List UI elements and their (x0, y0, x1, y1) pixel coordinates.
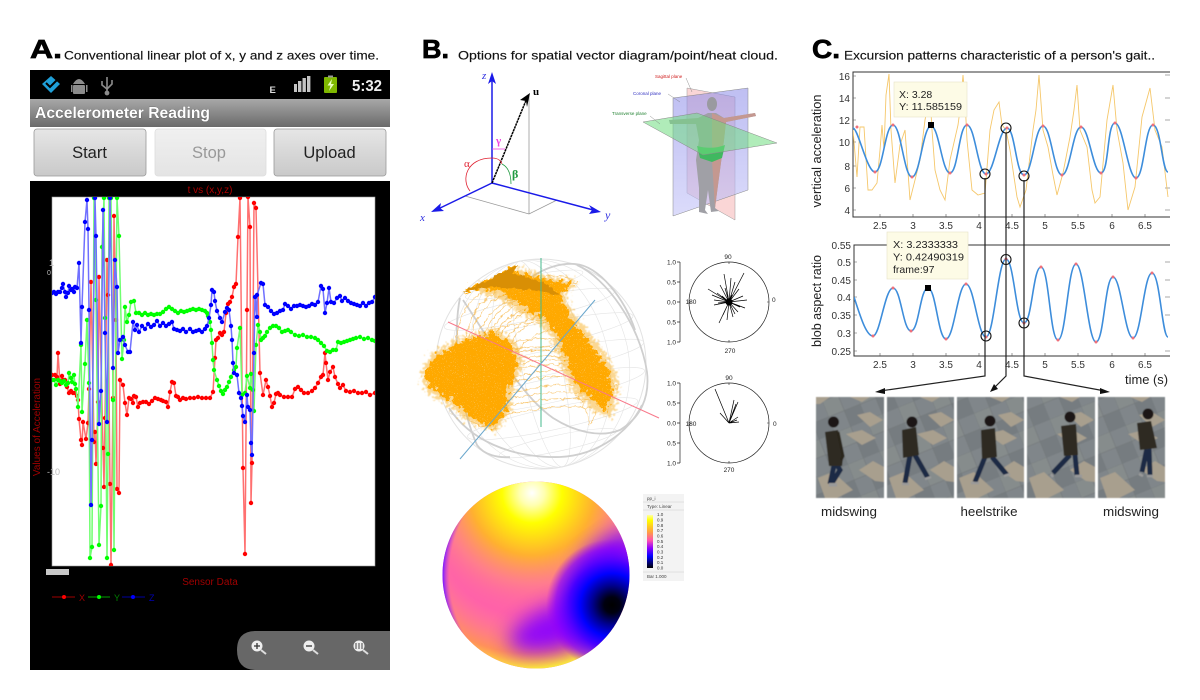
x axis labels: 4.5 (1005, 221, 1019, 232)
cluster fuzz (421, 268, 618, 432)
axis and angle labels: α (464, 158, 470, 170)
icon: blue check app (42, 76, 60, 93)
icon: usb (102, 77, 112, 95)
photo frame 5 (1098, 397, 1165, 498)
peak markers (856, 122, 1154, 180)
icon: zoom in (252, 640, 266, 654)
x axis labels: 4 (976, 221, 982, 232)
legend: heat colour scale: 0.9 (657, 518, 664, 522)
tooltip (887, 232, 968, 279)
labels: 1.0 (667, 380, 676, 388)
x axis labels: 5.5 (1071, 360, 1085, 371)
x axis title: time (s) (1125, 373, 1168, 387)
legend: heat colour scale: 0.1 (657, 560, 664, 565)
legend: Z (149, 593, 155, 603)
axes (448, 258, 659, 459)
zoom controls (237, 631, 390, 670)
labels: 0.0 (667, 300, 676, 306)
signal (854, 259, 1168, 342)
connectors: gait phases to frames (875, 123, 1110, 394)
labels: 90 (724, 254, 732, 261)
tooltip: X: 3.28 (899, 89, 932, 101)
sphere grid (416, 239, 666, 489)
axis and angle labels: u (533, 86, 539, 98)
legend: heat colour scale (643, 494, 684, 581)
photo strip: walking person (816, 397, 1165, 498)
cluster: arc (462, 265, 613, 413)
chart: heat sphere (442, 482, 630, 668)
legend: heat colour scale: 0.7 (657, 528, 664, 533)
series: x (52, 197, 375, 565)
series: y (52, 198, 375, 558)
button: start: Start (72, 144, 107, 162)
button: stop (155, 129, 266, 176)
great circles (449, 264, 648, 457)
x axis labels: 4.5 (1005, 360, 1019, 371)
cluster: left (425, 332, 517, 427)
labels: 90 (725, 375, 733, 382)
chart: vertical acceleration (810, 72, 1170, 232)
x axis labels: 6 (1109, 221, 1115, 232)
labels (667, 375, 777, 474)
filtered signal (853, 123, 1168, 178)
y axis labels: 4 (844, 206, 850, 217)
legend: heat colour scale: pp_i (647, 496, 656, 501)
button: stop: Stop (192, 144, 226, 162)
chart: blob aspect ratio (810, 232, 1170, 387)
axis title: Values of Acceleration (32, 378, 43, 476)
photo frame 1 (816, 397, 884, 498)
peak markers (872, 258, 1154, 344)
diagram: direction angles vector (419, 70, 611, 224)
y axis labels: 6 (844, 184, 850, 195)
heading: panel B (422, 34, 778, 64)
y axis labels: 0.5 (837, 258, 851, 269)
tick labels (47, 258, 60, 477)
tooltip: Y: 0.42490319 (893, 252, 964, 264)
x axis labels: 5.5 (1071, 221, 1085, 232)
labels: 0 (773, 421, 777, 428)
button: upload: Upload (303, 144, 356, 162)
label: heelstrike: heelstrike (960, 504, 1018, 519)
axis and angle labels: y (604, 208, 611, 222)
labels: 0.5 (667, 440, 676, 448)
y axis labels (832, 241, 851, 358)
icon: zoom out (304, 640, 318, 654)
data marker (925, 285, 931, 291)
y axis labels: 0.35 (832, 311, 851, 322)
y axis labels: 8 (844, 162, 850, 173)
x axis labels: 3.5 (939, 221, 953, 232)
heading: panel C: C. (812, 34, 840, 64)
diagram: human body anatomical planes (612, 74, 777, 220)
labels: 270 (724, 467, 735, 474)
vector u (492, 93, 530, 183)
strands (455, 276, 618, 430)
legend: Y (114, 593, 120, 603)
axis and angle labels: γ (495, 135, 501, 147)
axis and angle labels: β (512, 167, 518, 181)
legend: X (79, 593, 85, 603)
x axis labels: 6.5 (1138, 360, 1152, 371)
x axis labels: 6.5 (1138, 221, 1152, 232)
labels: 1.0 (667, 340, 676, 346)
x axis labels: 4 (976, 360, 982, 371)
x axis labels: 5 (1042, 221, 1048, 232)
series data (52, 197, 375, 565)
tooltip: Y: 11.585159 (899, 101, 962, 113)
plane labels: Sagittal plane (655, 74, 683, 79)
data marker (928, 122, 934, 128)
axis and angle labels: x (419, 212, 425, 224)
photo frame 4 (1027, 397, 1095, 498)
labels: 180 (686, 299, 697, 306)
x axis labels (873, 360, 1152, 371)
photo frame 3 (957, 397, 1024, 498)
y axis labels: 12 (839, 116, 850, 127)
legend: heat colour scale: 0.4 (657, 544, 664, 549)
x axis labels: 3 (910, 221, 916, 232)
legend: heat colour scale: 0.2 (657, 555, 664, 560)
series: z (52, 198, 375, 505)
label: midswing right: midswing (1103, 504, 1159, 519)
axes (436, 77, 597, 211)
x axis labels: 5 (1042, 360, 1048, 371)
title bar: Accelerometer Reading (35, 105, 210, 122)
icon: zoom fit (354, 640, 368, 654)
labels: 180 (686, 421, 697, 428)
chart title: t vs (x,y,z) (188, 185, 232, 196)
legend: heat colour scale: 0.5 (657, 539, 664, 544)
plane labels: Transverse plane (612, 111, 647, 116)
labels: 0.0 (667, 420, 676, 428)
y axis labels (839, 72, 850, 217)
tooltip: frame:97 (893, 264, 935, 276)
labels: 0.5 (667, 320, 676, 326)
chart: orange trajectories in sphere (416, 239, 666, 489)
tick labels: 0 (47, 270, 51, 277)
status bar (30, 70, 390, 99)
chart: polar plot top (667, 254, 776, 355)
title bar (30, 99, 390, 127)
x axis labels: 3 (910, 360, 916, 371)
labels: 0 (772, 297, 776, 304)
x axis labels: 2.5 (873, 221, 887, 232)
x axis labels: 2.5 (873, 360, 887, 371)
x axis labels (873, 221, 1152, 232)
figure (669, 97, 756, 214)
labels: 1.0 (667, 460, 676, 468)
x axis labels: 6 (1109, 360, 1115, 371)
axis and angle labels: z (481, 70, 487, 82)
y axis labels: 0.45 (832, 276, 851, 287)
labels: 270 (725, 348, 736, 355)
angle arcs (466, 149, 511, 191)
button: start (34, 129, 146, 176)
legend: heat colour scale: 0.6 (657, 534, 664, 538)
tick labels: -10 (47, 467, 60, 477)
icon: android (71, 79, 88, 94)
legend: heat colour scale: Bar 1.000 (647, 574, 667, 579)
heading: panel B: Options for spatial vector diagram/point/heat cloud. (458, 48, 778, 62)
line chart: t vs x,y,z (30, 181, 390, 670)
clock: 5:32 (352, 78, 382, 95)
heading: panel C (812, 34, 1155, 64)
photo frame 2 (887, 397, 954, 498)
x axis title: Sensor Data (182, 577, 238, 588)
labels: 0.5 (667, 400, 676, 408)
labels (667, 254, 776, 355)
chart: polar plot bottom (667, 375, 777, 474)
label: midswing left: midswing (821, 504, 877, 519)
x axis labels: 3.5 (939, 360, 953, 371)
icon: battery (324, 76, 337, 93)
labels: 0.5 (667, 280, 676, 286)
heading: panel A (30, 34, 379, 64)
labels: 1.0 (667, 260, 676, 266)
heading: panel C: Excursion patterns characteristic of a person's gait.. (844, 48, 1155, 62)
legend (52, 593, 155, 603)
y axis labels: 0.55 (832, 241, 851, 252)
tooltip (894, 82, 967, 117)
scroll thumb (46, 569, 69, 575)
y axis labels: 0.25 (832, 347, 851, 358)
y axis labels: 16 (839, 72, 850, 83)
y axis title: blob aspect ratio (810, 255, 824, 347)
button: upload (274, 129, 386, 176)
legend: heat colour scale: 0.3 (657, 550, 664, 554)
legend: heat colour scale: 1.0 (657, 512, 664, 517)
raw signal (853, 74, 1168, 210)
tooltip: X: 3.2333333 (893, 239, 958, 251)
rays (715, 389, 739, 423)
y axis labels: 0.4 (837, 293, 851, 304)
y axis title: vertical acceleration (810, 94, 824, 208)
heading: panel B: B. (422, 34, 449, 64)
y axis labels: 10 (839, 138, 850, 149)
icon: signal bars (294, 76, 310, 92)
plane labels (612, 74, 692, 124)
legend: heat colour scale: 0.8 (657, 523, 664, 528)
y axis labels: 0.3 (837, 329, 851, 340)
tick labels: 1 (49, 258, 54, 268)
legend: heat colour scale: Type: Linear (647, 504, 672, 509)
y axis labels: 14 (839, 94, 850, 105)
rays (708, 273, 747, 323)
axis and angle labels (419, 70, 611, 224)
icon: data E: E (270, 85, 276, 96)
legend: heat colour scale: 0.0 (657, 566, 664, 570)
plane labels: Coronal plane (633, 91, 662, 96)
panel A: phone screenshot (30, 70, 390, 670)
heading: panel A: Conventional linear plot of x, y and z axes over time. (64, 48, 379, 62)
cluster: dark tip (462, 265, 560, 296)
heading: panel A: A. (30, 34, 62, 64)
